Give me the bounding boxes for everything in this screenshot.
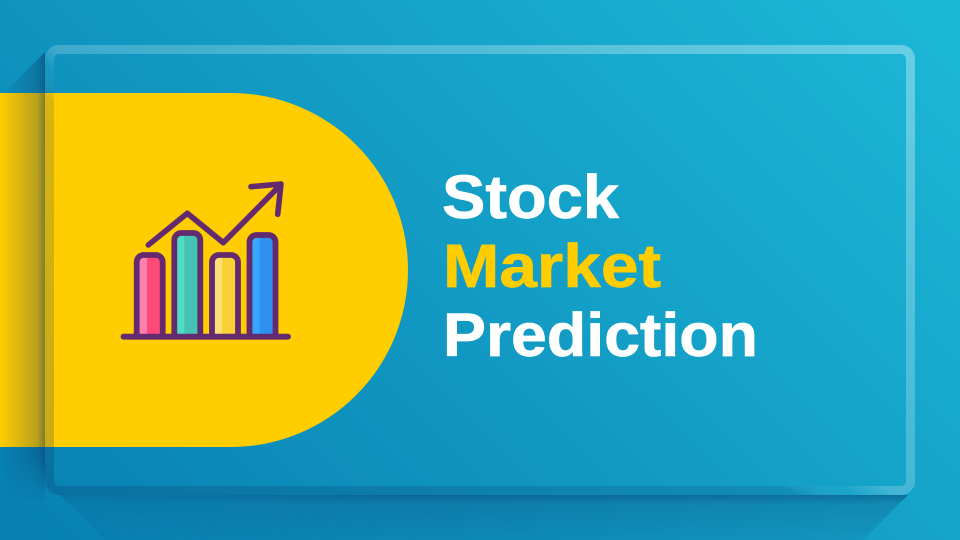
title line: Prediction: Prediction: [443, 301, 758, 369]
glass frame: [50, 50, 910, 490]
icon: green bar: [174, 233, 200, 335]
icon: chart baseline: [124, 334, 288, 340]
icon: yellow bar: [212, 255, 238, 335]
icon: blue bar: [250, 235, 276, 335]
icon: rising bar chart: [124, 184, 288, 337]
frame shadow: left: [4, 52, 45, 495]
title: [442, 163, 758, 369]
frame shadow: bottom: [60, 495, 908, 540]
title line: Stock: Stock: [442, 163, 619, 231]
title line: Market: Market: [443, 232, 661, 300]
yellow panel: [0, 93, 408, 447]
icon: pink bar: [137, 255, 163, 335]
icon: trend arrow: [148, 184, 281, 245]
